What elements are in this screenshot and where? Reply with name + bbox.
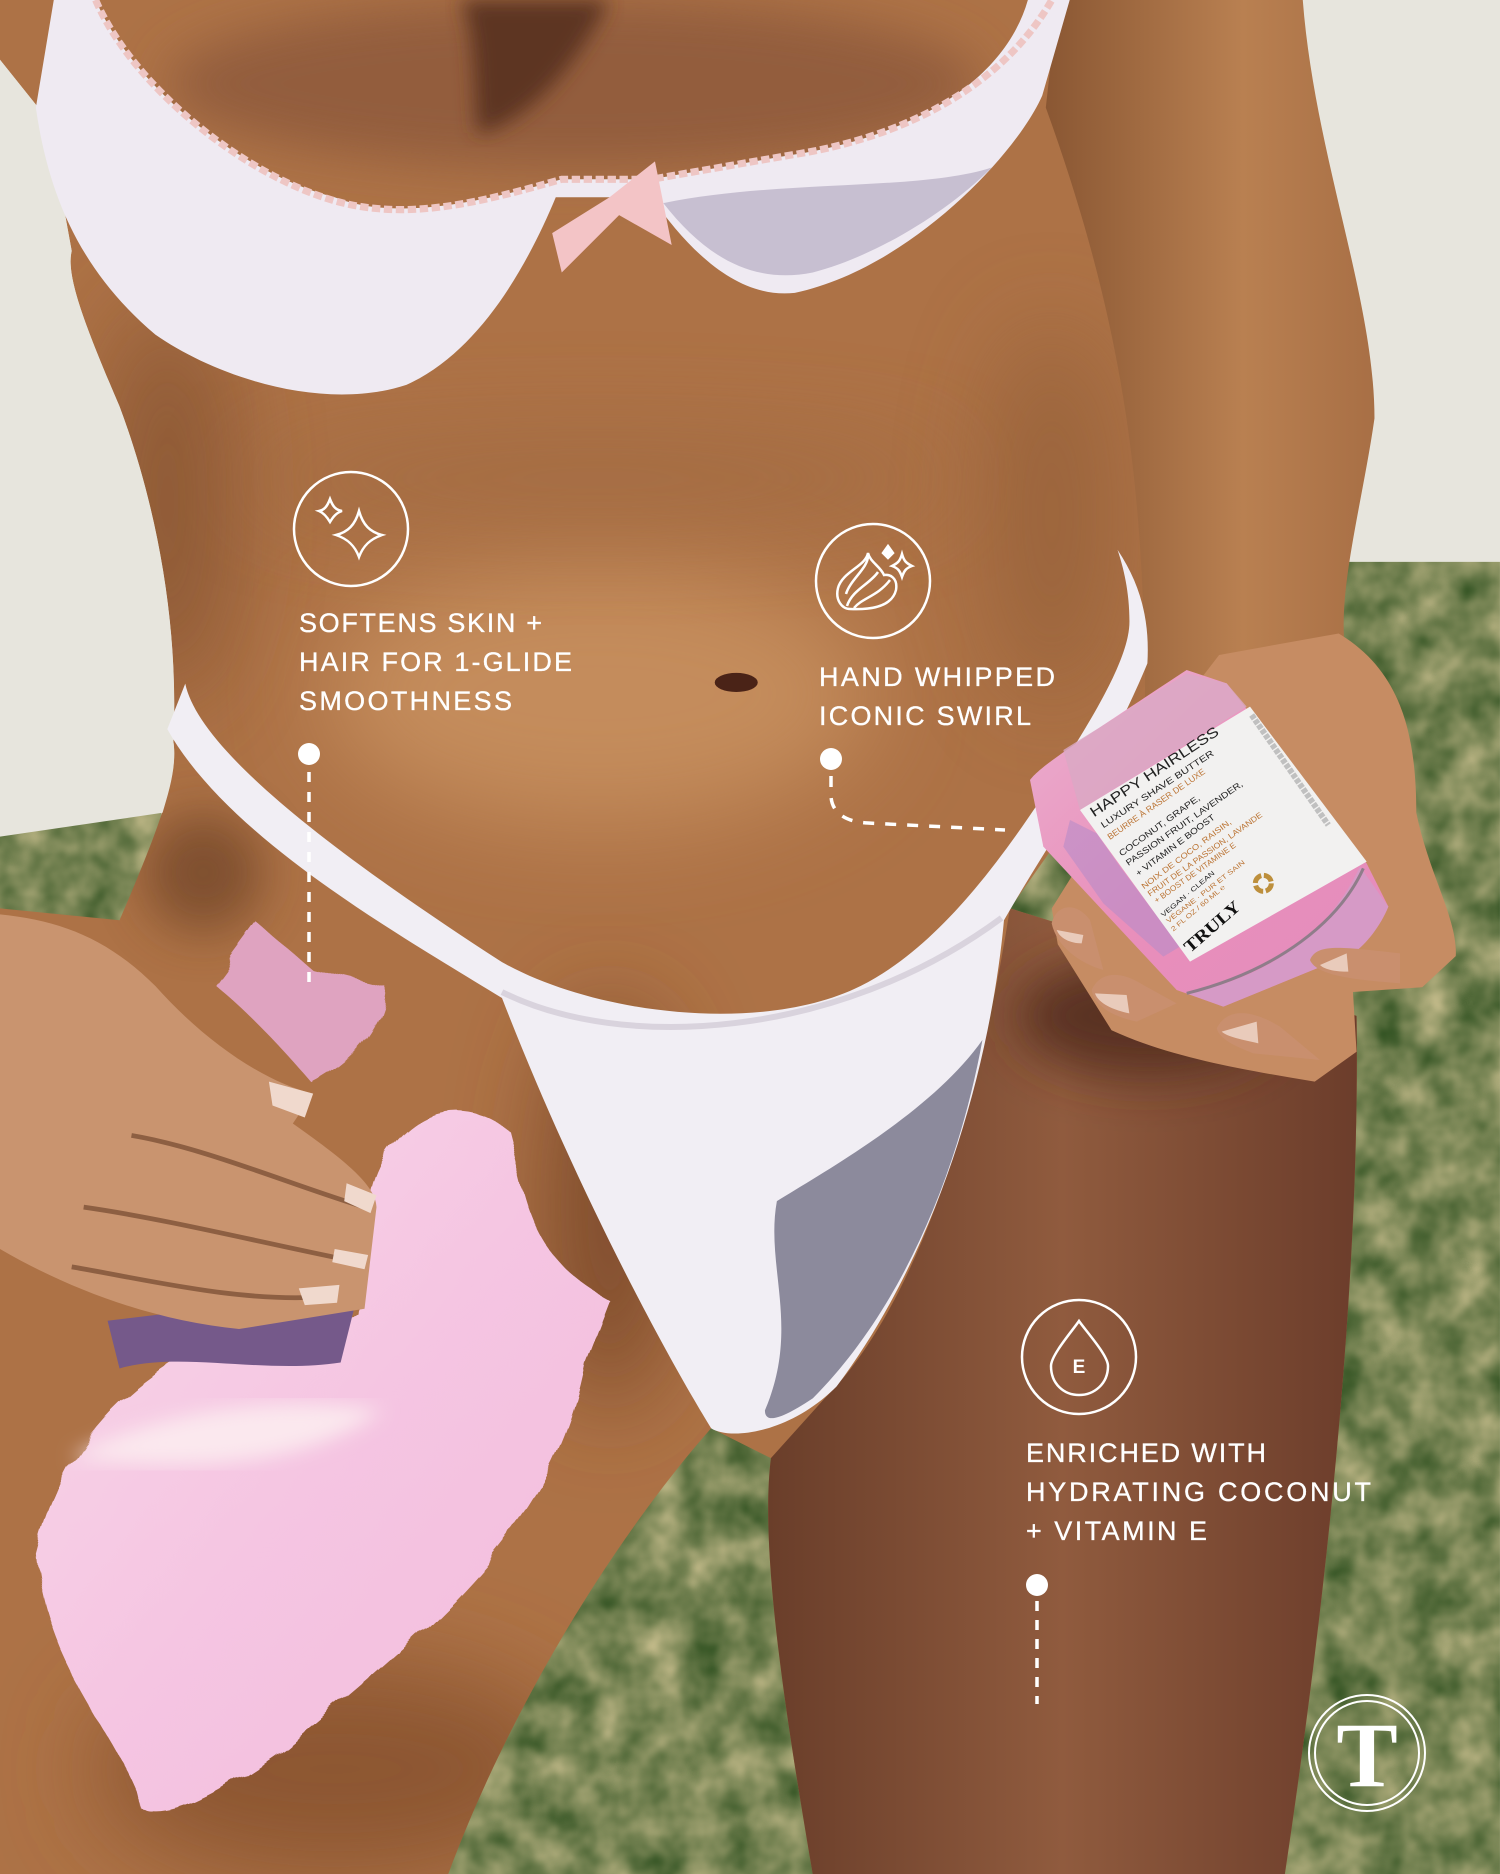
jar body	[1030, 670, 1388, 1007]
background wall	[0, 0, 1500, 861]
product jar	[1030, 670, 1400, 1060]
label ingredients english	[1117, 779, 1245, 878]
label subtitle: LUXURY SHAVE BUTTER	[1099, 748, 1216, 830]
label claims: VÉGANE · PUR ET SAIN	[1164, 858, 1247, 925]
label ingredients french: FRUIT DE LA PASSION, LAVANDE	[1146, 810, 1264, 898]
jar lavender swirl	[1063, 820, 1180, 957]
fingers over jar	[1052, 907, 1400, 1060]
leader line	[1026, 1574, 1048, 1704]
callout: softens skin	[294, 472, 572, 986]
jar base ring	[1187, 868, 1363, 993]
label claims	[1160, 858, 1247, 933]
jar label	[1080, 707, 1367, 962]
hip shadow below jar	[1016, 956, 1279, 1076]
right thigh	[768, 908, 1357, 1874]
callout text: SOFTENS SKIN +	[299, 608, 542, 638]
bow	[552, 161, 672, 273]
background grass	[0, 562, 1500, 1874]
label french subtitle: BEURRE À RASER DE LUXE	[1105, 766, 1207, 842]
bra	[36, 0, 1070, 394]
callout: enriched	[1022, 1300, 1371, 1704]
callout text: ICONIC SWIRL	[819, 701, 1031, 731]
callout text	[819, 662, 1055, 731]
wall beside left waist	[0, 60, 174, 837]
icon: vitamin E drop	[1022, 1300, 1136, 1414]
icon: vitamin E drop: E	[1073, 1357, 1085, 1378]
swimwear bottom	[167, 550, 1148, 1434]
hair	[460, 0, 610, 134]
jar base	[1187, 867, 1388, 1007]
leader line	[820, 748, 1005, 830]
label ingredients english: COCONUT, GRAPE,	[1117, 793, 1202, 858]
label claims: VEGAN · CLEAN	[1160, 870, 1217, 919]
label brand: TRULY	[1180, 897, 1245, 956]
icon: recycle	[1255, 875, 1271, 891]
callout text: ENRICHED WITH	[1026, 1438, 1266, 1468]
right arm	[1046, 0, 1374, 717]
callout: hand whipped	[816, 524, 1055, 830]
finger nails	[1057, 930, 1348, 1043]
label claims: 2 FL OZ / 60 ML ℮	[1170, 884, 1227, 933]
label ingredients english: + VITAMIN E BOOST	[1134, 812, 1217, 878]
label ingredients french: + BOOST DE VITAMINE E	[1153, 841, 1238, 905]
shave butter swatch on thigh	[36, 923, 610, 1813]
callout text: HYDRATING COCONUT	[1026, 1477, 1371, 1507]
skin shading	[96, 0, 1112, 1874]
icon: sparkles	[294, 472, 408, 586]
jar glass rim	[1063, 673, 1247, 810]
callout text	[299, 608, 572, 716]
callout text: HAIR FOR 1-GLIDE	[299, 647, 572, 677]
logo: Truly T monogram: T	[1336, 1704, 1398, 1806]
label fine print	[1252, 715, 1328, 825]
label ingredients french: NOIX DE COCO, RAISIN,	[1140, 818, 1233, 891]
callout text: HAND WHIPPED	[819, 662, 1055, 692]
callout text: SMOOTHNESS	[299, 686, 512, 716]
callout text: + VITAMIN E	[1026, 1516, 1207, 1546]
label ingredients english: PASSION FRUIT, LAVENDER,	[1124, 779, 1245, 868]
leader line	[298, 743, 320, 986]
right hand	[1052, 633, 1456, 1082]
icon: whipped swirl	[816, 524, 930, 638]
left hand	[0, 914, 376, 1329]
navel	[715, 673, 758, 692]
label title: HAPPY HAIRLESS	[1087, 724, 1222, 821]
logo: Truly T monogram	[1309, 1695, 1425, 1811]
callout text	[1026, 1438, 1371, 1546]
